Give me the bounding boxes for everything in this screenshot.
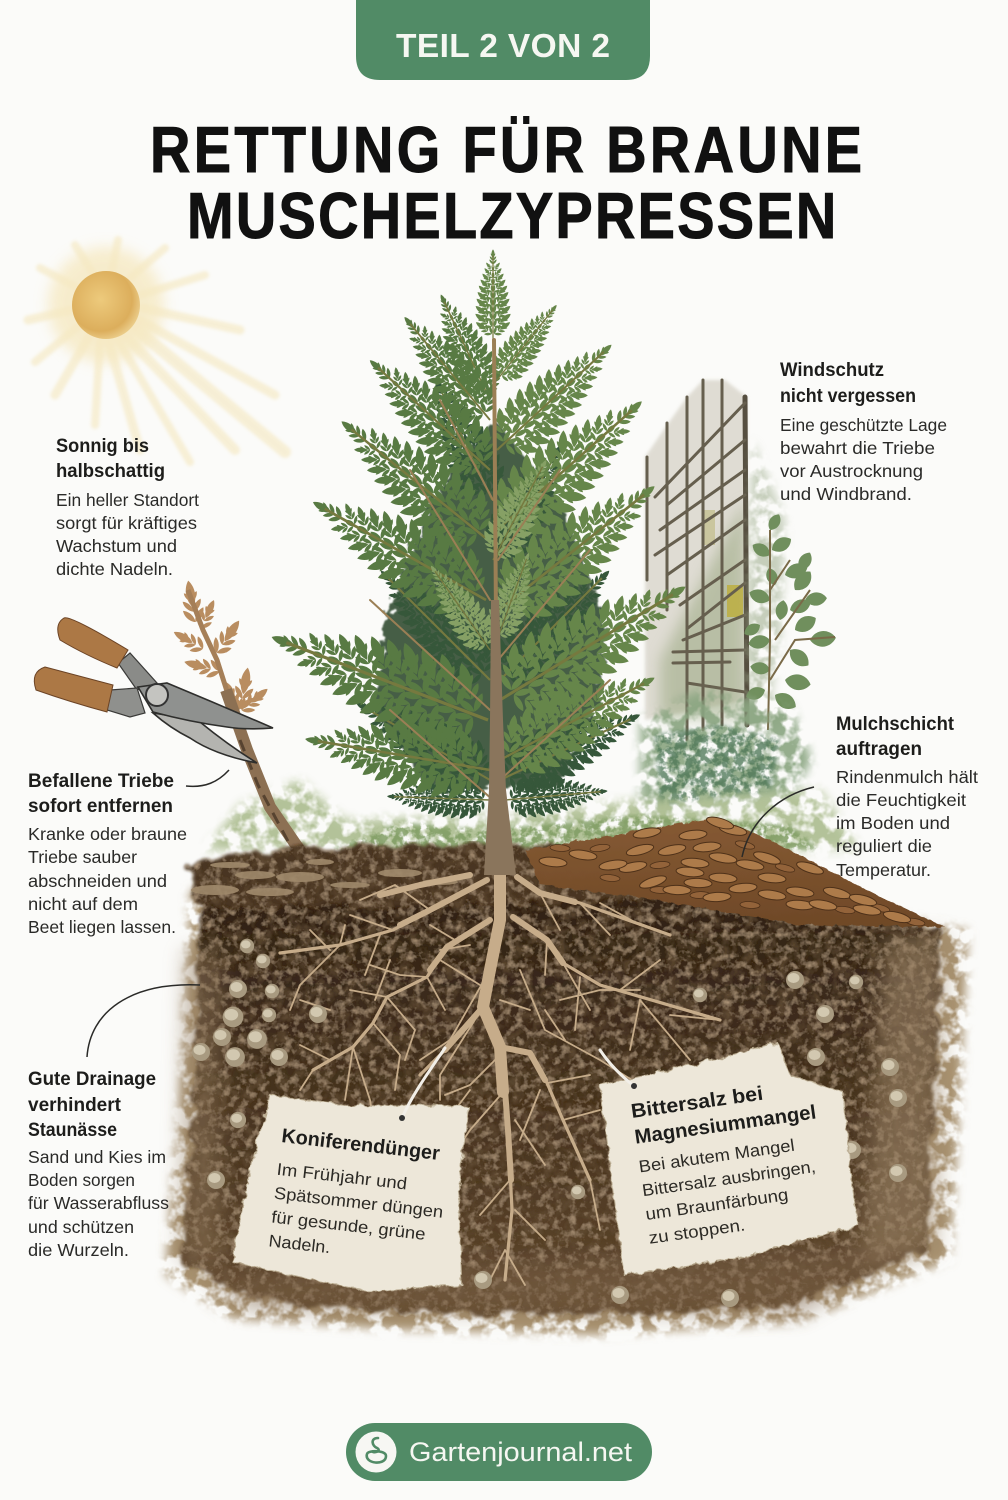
text block: drainage: und schützen <box>28 1217 134 1237</box>
lower shrubs behind tree <box>640 690 812 815</box>
mid fronds left <box>252 283 516 814</box>
ground grass <box>205 780 860 850</box>
paper note: Bittersalz: zu stoppen. <box>648 1215 746 1248</box>
text block: drainage: für Wasserabfluss <box>28 1193 169 1213</box>
canopy shadow <box>375 420 605 790</box>
text block: drainage: Gute Drainage <box>28 1069 156 1090</box>
title <box>150 113 862 252</box>
text block: remove infested shoots: Befallene Triebe <box>28 771 174 792</box>
pin line to Bittersalz note <box>600 1050 637 1089</box>
text block: wind protection: vor Austrocknung <box>780 461 923 481</box>
text block: remove infested shoots: sofort entfernen <box>28 796 173 817</box>
text block: drainage: Boden sorgen <box>28 1170 135 1190</box>
paper note: Bittersalz: Bittersalz ausbringen, <box>641 1157 817 1200</box>
text block: mulch layer: reguliert die <box>836 836 932 856</box>
text block: wind protection: und Windbrand. <box>780 484 912 504</box>
bush behind trellis <box>742 440 837 740</box>
text block: remove infested shoots: Triebe sauber <box>28 847 137 867</box>
top tab: part label: TEIL 2 VON 2 <box>396 28 610 65</box>
text block: wind protection: Windschutz <box>780 360 884 381</box>
paper note: Koniferendünger <box>232 1095 468 1292</box>
paper note: Bittersalz <box>600 1043 858 1275</box>
text block: drainage: Sand und Kies im <box>28 1147 166 1167</box>
text block: sunny location: sorgt für kräftiges <box>56 513 197 533</box>
text block: drainage: Staunässe <box>28 1120 117 1141</box>
text block: wind protection <box>780 360 947 504</box>
text block: wind protection: nicht vergessen <box>780 386 916 407</box>
paper note: Bittersalz: Bittersalz bei <box>630 1083 764 1123</box>
paper note: Koniferendünger: für gesunde, grüne <box>270 1207 427 1244</box>
mulch pile <box>525 818 945 927</box>
paper note: Koniferendünger: Spätsommer düngen <box>273 1184 444 1222</box>
text block: mulch layer: Mulchschicht <box>836 714 955 735</box>
pin line to Koniferendünger note <box>399 1048 445 1121</box>
callout arrow: drainage <box>87 985 200 1057</box>
icon: sun <box>28 240 285 462</box>
mid fronds right <box>466 249 712 797</box>
leaf litter on surface <box>191 859 458 896</box>
paper note: Bittersalz: um Braunfärbung <box>644 1185 789 1224</box>
trunk <box>484 600 516 875</box>
dead branch being cut <box>169 579 303 855</box>
text block: sunny location: Sonnig bis <box>56 436 149 457</box>
stones in soil <box>192 939 907 1307</box>
tree canopy <box>252 249 712 824</box>
paper note: Bittersalz: Magnesiummangel <box>633 1101 818 1149</box>
text block: drainage: die Wurzeln. <box>28 1240 129 1260</box>
text block: remove infested shoots: nicht auf dem <box>28 894 138 914</box>
text block: mulch layer: auftragen <box>836 739 922 760</box>
top tab: part label <box>356 0 650 80</box>
footer pill: Gartenjournal.net: Gartenjournal.net <box>409 1437 633 1467</box>
mulch chips <box>539 815 925 927</box>
paper note: Koniferendünger: Koniferendünger <box>280 1125 441 1165</box>
text block: drainage <box>28 1069 169 1260</box>
text block: mulch layer: die Feuchtigkeit <box>836 790 966 810</box>
title: MUSCHELZYPRESSEN <box>187 179 836 252</box>
ground surface <box>186 845 640 908</box>
garden shears <box>34 618 273 763</box>
text block: sunny location: Wachstum und <box>56 536 177 556</box>
text block: drainage: verhindert <box>28 1095 122 1116</box>
text block: remove infested shoots: Kranke oder braune <box>28 824 187 844</box>
text block: sunny location: halbschattig <box>56 461 165 482</box>
text block: mulch layer: Rindenmulch hält <box>836 767 978 787</box>
paper note: Koniferendünger: Nadeln. <box>268 1231 331 1257</box>
icon: logo <box>356 1432 396 1472</box>
text block: sunny location: Ein heller Standort <box>56 490 199 510</box>
footer pill: Gartenjournal.net <box>346 1423 652 1481</box>
text block: wind protection: Eine geschützte Lage <box>780 415 947 435</box>
text block: mulch layer: Temperatur. <box>836 860 931 880</box>
trellis windbreak <box>645 380 747 740</box>
title: RETTUNG FÜR BRAUNE <box>150 113 862 186</box>
branch stems <box>370 340 610 800</box>
text block: remove infested shoots: Beet liegen lassen. <box>28 917 176 937</box>
text block: wind protection: bewahrt die Triebe <box>780 438 935 458</box>
soil cross-section <box>165 885 968 1335</box>
text block: remove infested shoots: abschneiden und <box>28 871 167 891</box>
dark fronds <box>338 365 656 824</box>
text block: sunny location: dichte Nadeln. <box>56 559 173 579</box>
light fronds <box>411 447 570 664</box>
text block: sunny location <box>56 436 199 579</box>
text block: remove infested shoots <box>28 771 187 937</box>
paper note: Bittersalz: Bei akutem Mangel <box>638 1136 796 1176</box>
paper note: Koniferendünger: Im Frühjahr und <box>276 1160 408 1193</box>
callout arrow: pruning <box>186 770 229 786</box>
roots <box>280 865 720 1285</box>
text block: mulch layer <box>836 714 978 880</box>
callout arrow: mulch <box>742 787 814 857</box>
text block: mulch layer: im Boden und <box>836 813 950 833</box>
